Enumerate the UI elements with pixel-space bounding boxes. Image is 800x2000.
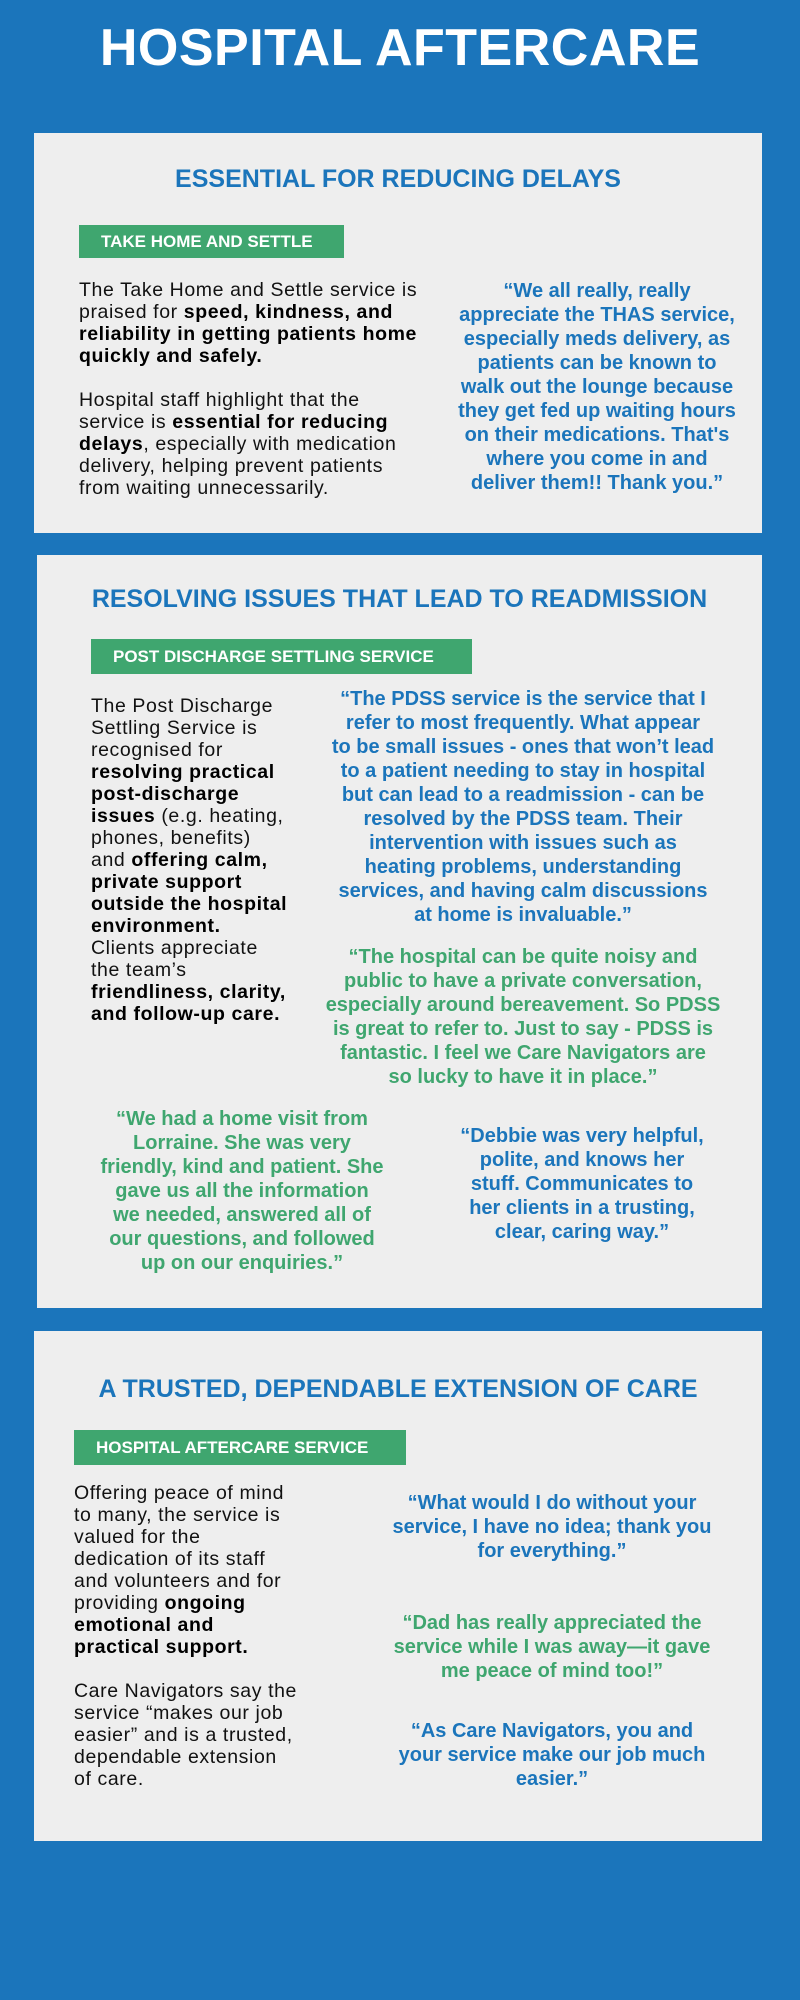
text block: providing ongoing — [74, 1592, 246, 1614]
quote: noisy hospital — [326, 946, 720, 1088]
text block: emotional and — [74, 1614, 214, 1636]
text block: easier” and is a trusted, — [74, 1724, 293, 1746]
quote: PDSS — [332, 688, 714, 926]
quote: where you come in and — [486, 448, 708, 470]
quote: Lorraine: gave us all the information — [115, 1180, 369, 1202]
text block: Clients appreciate — [91, 937, 258, 959]
quote: Debbie: polite, and knows her — [480, 1149, 684, 1171]
quote: noisy hospital: so lucky to have it in place.” — [388, 1066, 657, 1088]
title: HOSPITAL AFTERCARE — [100, 19, 700, 77]
text block: praised for speed, kindness, and — [79, 301, 393, 323]
quote: they get fed up waiting hours — [458, 400, 736, 422]
tag: post discharge settling service: POST DISCHARGE SETTLING SERVICE — [113, 646, 434, 666]
quote: Debbie: stuff. Communicates to — [471, 1173, 693, 1195]
tag: hospital aftercare service: HOSPITAL AFTERCARE SERVICE — [96, 1438, 368, 1456]
text block: practical support. — [74, 1636, 248, 1658]
quote: Lorraine: friendly, kind and patient. She — [100, 1156, 384, 1178]
text block — [91, 695, 287, 1025]
tag: hospital aftercare service — [74, 1430, 406, 1465]
text block: dedication of its staff — [74, 1548, 265, 1570]
quote: patients can be known to — [478, 352, 716, 374]
text block: of care. — [74, 1768, 144, 1790]
quote: Lorraine — [100, 1108, 384, 1274]
text block — [79, 279, 417, 499]
text block: resolving practical — [91, 761, 275, 783]
quote 1: “What would I do without your — [408, 1492, 696, 1514]
heading: A TRUSTED, DEPENDABLE EXTENSION OF CARE — [98, 1375, 698, 1403]
quote: Lorraine: “We had a home visit from — [116, 1108, 368, 1130]
quote: PDSS: to a patient needing to stay in hospital — [341, 760, 705, 782]
heading: RESOLVING ISSUES THAT LEAD TO READMISSION — [92, 585, 707, 613]
tag: take home and settle: TAKE HOME AND SETTLE — [101, 232, 313, 250]
quote 2: me peace of mind too!” — [441, 1660, 663, 1682]
text block — [74, 1482, 297, 1790]
text block: The Post Discharge — [91, 695, 273, 717]
quote: PDSS: refer to most frequently. What appear — [346, 712, 700, 734]
text block: phones, benefits) — [91, 827, 251, 849]
quote: Debbie: “Debbie was very helpful, — [460, 1125, 704, 1147]
text block: valued for the — [74, 1526, 201, 1548]
text block: delivery, helping prevent patients — [79, 455, 383, 477]
quote: Lorraine: we needed, answered all of — [113, 1204, 371, 1226]
text block: recognised for — [91, 739, 223, 761]
quote: PDSS: intervention with issues such as — [369, 832, 677, 854]
text block: Offering peace of mind — [74, 1482, 284, 1504]
quote 3: easier.” — [516, 1768, 588, 1790]
quote: on their medications. That's — [465, 424, 729, 446]
heading: ESSENTIAL FOR REDUCING DELAYS — [175, 165, 621, 193]
panel: essential for reducing delays — [34, 133, 762, 533]
quote: Lorraine: up on our enquiries.” — [141, 1252, 343, 1274]
text block: Care Navigators say the — [74, 1680, 297, 1702]
text block: Settling Service is — [91, 717, 257, 739]
quote 3: “As Care Navigators, you and — [411, 1720, 693, 1742]
text block: and follow-up care. — [91, 1003, 280, 1025]
text block: The Take Home and Settle service is — [79, 279, 417, 301]
text block: to many, the service is — [74, 1504, 280, 1526]
quote 2: “Dad has really appreciated the — [402, 1612, 702, 1634]
panel: trusted extension of care — [34, 1331, 762, 1841]
quote: noisy hospital: especially around bereavement. So PDSS — [326, 994, 720, 1016]
quote 1 — [392, 1492, 712, 1562]
quote: noisy hospital: “The hospital can be quite noisy and — [349, 946, 697, 968]
quote 3 — [398, 1720, 705, 1790]
quote: Debbie — [460, 1125, 704, 1243]
quote: Lorraine: our questions, and followed — [109, 1228, 375, 1250]
text block: post-discharge — [91, 783, 239, 805]
quote 3: your service make our job much — [399, 1744, 705, 1766]
text block: friendliness, clarity, — [91, 981, 286, 1003]
quote 2 — [394, 1612, 710, 1682]
quote: especially meds delivery, as — [464, 328, 730, 350]
tag: take home and settle — [79, 225, 344, 258]
text block: outside the hospital — [91, 893, 287, 915]
quote: noisy hospital: is great to refer to. Just to say - PDSS is — [333, 1018, 713, 1040]
quote: “We all really, really — [503, 280, 691, 302]
quote: Lorraine: Lorraine. She was very — [133, 1132, 351, 1154]
panel: resolving issues — [37, 555, 762, 1308]
text block: private support — [91, 871, 242, 893]
text block: service “makes our job — [74, 1702, 283, 1724]
text block: issues (e.g. heating, — [91, 805, 284, 827]
text block: environment. — [91, 915, 221, 937]
quote: PDSS: heating problems, understanding — [365, 856, 681, 878]
quote: PDSS: to be small issues - ones that won’t lead — [332, 736, 714, 758]
text block: the team’s — [91, 959, 187, 981]
quote: Debbie: her clients in a trusting, — [469, 1197, 695, 1219]
text block: delays, especially with medication — [79, 433, 396, 455]
quote: PDSS: resolved by the PDSS team. Their — [364, 808, 682, 830]
text block: quickly and safely. — [79, 345, 262, 367]
quote 1: service, I have no idea; thank you — [392, 1516, 712, 1538]
quote: noisy hospital: public to have a private conversation, — [344, 970, 702, 992]
quote: noisy hospital: fantastic. I feel we Care Navigators are — [340, 1042, 706, 1064]
quote 2: service while I was away—it gave — [394, 1636, 710, 1658]
quote: Debbie: clear, caring way.” — [495, 1221, 669, 1243]
quote: PDSS: services, and having calm discussions — [338, 880, 708, 902]
text block: from waiting unnecessarily. — [79, 477, 329, 499]
text block: reliability in getting patients home — [79, 323, 417, 345]
quote: PDSS: at home is invaluable.” — [414, 904, 632, 926]
text block: Hospital staff highlight that the — [79, 389, 360, 411]
quote 1: for everything.” — [478, 1540, 626, 1562]
text block: and offering calm, — [91, 849, 268, 871]
quote: PDSS: “The PDSS service is the service that I — [340, 688, 706, 710]
tag: post discharge settling service — [91, 639, 472, 674]
quote: deliver them!! Thank you.” — [471, 472, 723, 494]
text block: dependable extension — [74, 1746, 277, 1768]
quote — [458, 280, 736, 494]
quote: PDSS: but can lead to a readmission - can be — [342, 784, 704, 806]
quote: walk out the lounge because — [461, 376, 733, 398]
text block: and volunteers and for — [74, 1570, 281, 1592]
text block: service is essential for reducing — [79, 411, 388, 433]
quote: appreciate the THAS service, — [459, 304, 735, 326]
